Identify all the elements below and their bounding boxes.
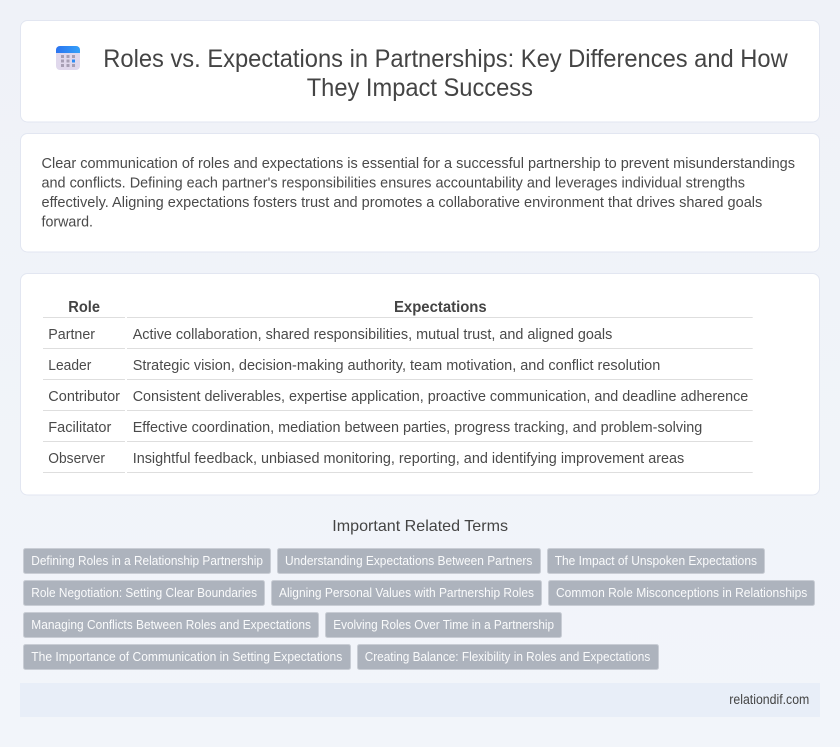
tag: [548, 548, 764, 574]
tag: [358, 644, 658, 670]
text block: introduction paragraph: Clear communication of roles and expectations is essential for a successful partnership to prevent misunderstandings: [42, 156, 795, 172]
table row: Leader: [43, 358, 753, 380]
tag: [24, 644, 350, 670]
panel: introduction: [20, 134, 820, 252]
text block: introduction paragraph: [42, 156, 795, 230]
tag: Role Negotiation: Setting Clear Boundaries: [31, 586, 257, 600]
title: They Impact Success: [307, 74, 533, 102]
table row: Observer: Observer: [48, 451, 105, 467]
table row: Contributor: Consistent deliverables, expertise application, proactive communication, and deadline adherence: [133, 389, 748, 405]
table row: Facilitator: Facilitator: [48, 420, 111, 436]
tag: [24, 612, 318, 638]
heading: important related terms: Important Related Terms: [332, 518, 508, 535]
table row: Leader: Leader: [48, 358, 91, 374]
tag: The Impact of Unspoken Expectations: [555, 554, 757, 568]
table header: Expectations: [394, 299, 487, 316]
tag: [24, 548, 270, 574]
tag: Creating Balance: Flexibility in Roles and Expectations: [365, 650, 650, 664]
tag: [548, 580, 814, 606]
title: [103, 45, 789, 102]
table row: Partner: [43, 327, 753, 349]
table row: Facilitator: Effective coordination, mediation between parties, progress tracking, and problem-solving: [133, 420, 702, 436]
table header: Role: [68, 299, 100, 316]
table row: Observer: [43, 451, 753, 473]
table row: Partner: Partner: [48, 327, 95, 343]
tag: [272, 580, 542, 606]
footer: relationdif.com: [729, 692, 809, 707]
table row: Observer: Insightful feedback, unbiased monitoring, reporting, and identifying improvement areas: [133, 451, 684, 467]
title: Roles vs. Expectations in Partnerships: Key Differences and How: [103, 45, 789, 73]
table row: Partner: Active collaboration, shared responsibilities, mutual trust, and aligned goals: [133, 327, 612, 343]
panel: related term tags: [24, 548, 814, 670]
text block: introduction paragraph: effectively. Aligning expectations fosters trust and promotes a collaborative environment that drives shared goals: [42, 195, 762, 211]
tag: Evolving Roles Over Time in a Partnership: [333, 618, 554, 632]
table row: Facilitator: [43, 420, 753, 442]
table row: Contributor: Contributor: [48, 389, 120, 405]
tag: Defining Roles in a Relationship Partnership: [31, 554, 263, 568]
tag: Managing Conflicts Between Roles and Expectations: [31, 618, 311, 632]
tag: The Importance of Communication in Setting Expectations: [31, 650, 342, 664]
footer: [20, 683, 820, 717]
tag: Common Role Misconceptions in Relationships: [556, 586, 807, 600]
table header: [43, 299, 753, 318]
tag: Aligning Personal Values with Partnership Roles: [279, 586, 534, 600]
text block: introduction paragraph: forward.: [42, 214, 93, 230]
text block: introduction paragraph: and conflicts. Defining each partner's responsibilities ensures accountability and leverages individual strengths: [42, 176, 745, 192]
tag: [326, 612, 562, 638]
tag: [24, 580, 264, 606]
panel: roles and expectations table: [20, 274, 820, 495]
panel: header: [20, 20, 820, 122]
icon: calendar: [56, 46, 80, 70]
table row: Contributor: [43, 389, 753, 411]
tag: [278, 548, 540, 574]
table row: Leader: Strategic vision, decision-making authority, team motivation, and conflict resolution: [133, 358, 660, 374]
tag: Understanding Expectations Between Partners: [285, 554, 532, 568]
